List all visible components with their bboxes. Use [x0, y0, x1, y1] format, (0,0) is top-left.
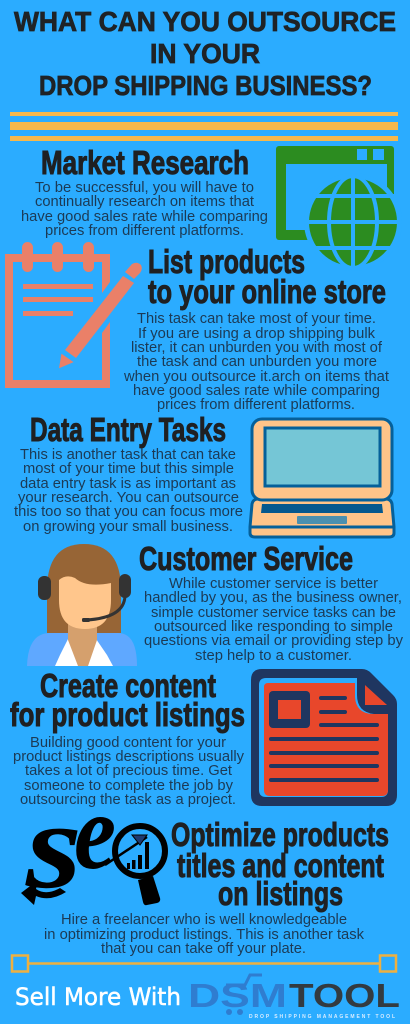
text: list products: when you outsource it.arch on items that	[123, 369, 389, 385]
heading: create content: Create content	[40, 667, 216, 704]
text: list products	[123, 311, 389, 413]
text: list products: have good sales rate while comparing	[133, 383, 380, 399]
text: customer service: While customer service is better	[169, 576, 378, 592]
panel: create content	[10, 667, 397, 808]
footer: sell more with: Sell More With	[15, 983, 181, 1011]
title: IN YOUR	[150, 38, 260, 69]
text: customer service: questions via email or providing step by	[144, 633, 404, 649]
text: market research: have good sales rate while comparing	[21, 209, 268, 225]
heading: list products	[148, 243, 386, 310]
divider with squares	[12, 956, 396, 972]
text: list products: lister, it can unburden you with most of	[131, 340, 382, 356]
text: create content: product listings descriptions usually	[13, 749, 245, 765]
logo: dsm tool	[188, 975, 400, 1020]
icon: seo magnifier: s	[25, 777, 82, 914]
panel: optimize products	[21, 773, 389, 957]
text: list products: the task and can unburden you more	[137, 354, 377, 370]
text: data entry tasks: most of your time but this simple	[23, 461, 234, 477]
text: list products: If you are using a drop shipping bulk	[138, 326, 376, 342]
panel: market research	[21, 144, 402, 271]
text: market research: prices from different platforms.	[45, 223, 244, 239]
heading: list products: List products	[148, 243, 305, 280]
heading: create content: for product listings	[10, 696, 245, 733]
text: data entry tasks: data entry task is as important as	[20, 476, 236, 492]
heading: create content	[10, 667, 245, 733]
logo: dsm tool: TOOL	[289, 977, 400, 1014]
text: list products: This task can take most of your time.	[137, 311, 376, 327]
heading: optimize products: on listings	[218, 875, 343, 912]
title underline bars	[10, 112, 398, 141]
text: customer service	[144, 576, 404, 664]
icon: notepad and pencil	[5, 242, 142, 388]
heading: optimize products	[171, 816, 389, 912]
text: market research	[21, 180, 268, 239]
text: optimize products: Hire a freelancer who is well knowledgeable	[61, 912, 347, 928]
text: market research: To be successful, you will have to	[35, 180, 254, 196]
text: optimize products	[44, 912, 365, 957]
logo: dsm tool: DROP SHIPPING MANAGEMENT TOOL	[249, 1014, 395, 1020]
text: data entry tasks: on growing your small business.	[23, 519, 233, 535]
icon: customer service agent	[27, 544, 137, 666]
text: list products: prices from different platforms.	[157, 397, 355, 413]
text: create content: someone to complete the job by	[24, 778, 234, 794]
icon: document	[251, 669, 397, 806]
heading: data entry tasks: Data Entry Tasks	[30, 411, 226, 448]
text: create content: Building good content for your	[30, 735, 226, 751]
panel: data entry tasks	[14, 411, 394, 537]
text: customer service: step help to a customer.	[195, 648, 352, 664]
text: customer service: handled by you, as the business owner,	[144, 590, 402, 606]
title: WHAT CAN YOU OUTSOURCE	[14, 6, 396, 37]
text: data entry tasks	[14, 447, 243, 535]
text: optimize products: in optimizing product listings. This is another task	[44, 927, 365, 943]
text: create content: takes a lot of precious time. Get	[25, 763, 232, 779]
icon: browser window with globe	[276, 146, 402, 271]
icon: seo magnifier: e	[74, 773, 116, 892]
logo: dsm tool: DSM	[188, 977, 287, 1014]
icon: laptop	[250, 419, 394, 537]
heading: market research: Market Research	[41, 144, 249, 181]
text: customer service: outsourced like responding to simple	[154, 619, 393, 635]
title	[14, 6, 396, 101]
text: data entry tasks: your research. You can outsource	[18, 490, 239, 506]
text: create content: outsourcing the task as a project.	[20, 792, 236, 808]
text: optimize products: that you can take off your plate.	[101, 941, 306, 957]
text: data entry tasks: this too so that you can focus more	[14, 504, 243, 520]
text: customer service: simple customer service tasks can be	[151, 605, 396, 621]
icon: seo magnifier	[21, 773, 165, 914]
text: data entry tasks: This is another task that can take	[20, 447, 236, 463]
text: market research: continually research on items that	[35, 194, 254, 210]
panel: customer service	[27, 540, 404, 666]
panel: list products	[5, 242, 389, 413]
text: create content	[13, 735, 245, 808]
